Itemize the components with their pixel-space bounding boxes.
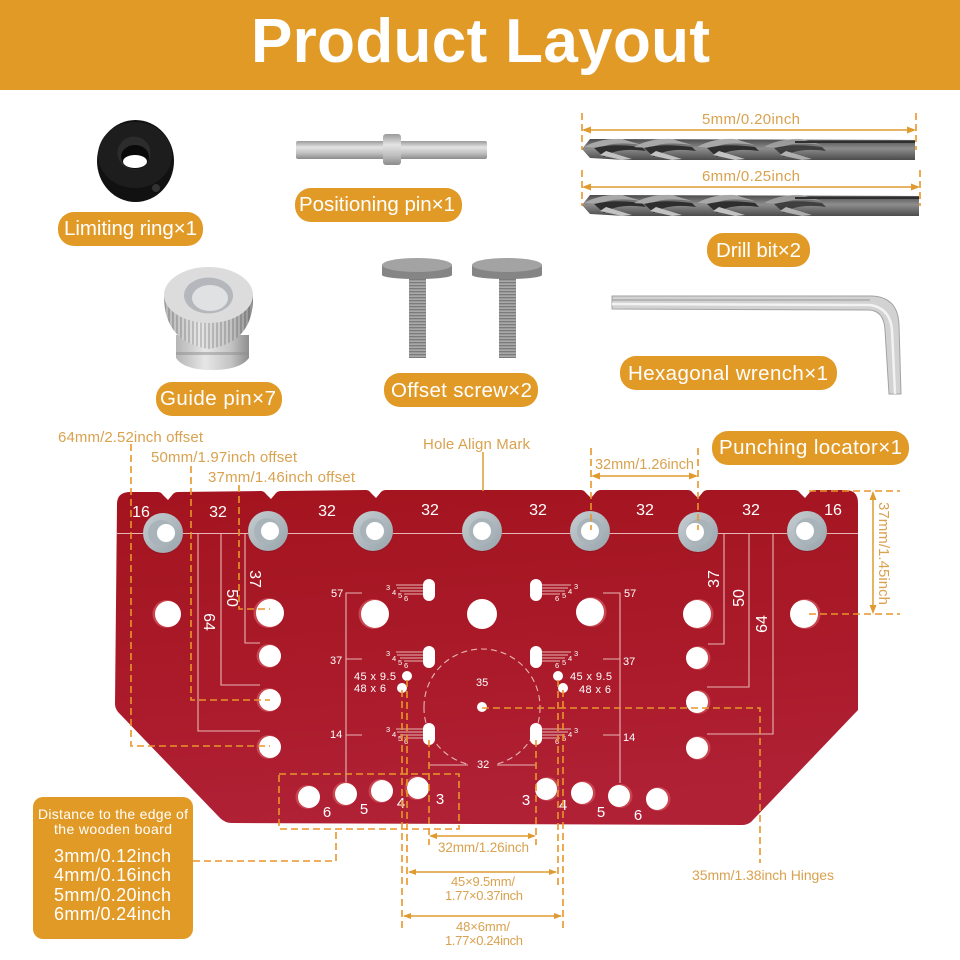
bottom edge distance numbers: 5 <box>360 801 368 818</box>
label: positioning pin: Positioning pin×1 <box>299 193 455 216</box>
drill bit 6mm <box>582 195 919 216</box>
dimension: 45x9.5mm: 45×9.5mm/ <box>451 874 515 889</box>
bottom edge distance numbers: 4 <box>397 795 405 812</box>
callout: distance to edge: 6mm/0.24inch <box>54 904 171 924</box>
callout: distance to edge: the wooden board <box>54 821 172 837</box>
header band <box>0 0 960 90</box>
small hole numbers: 48 x 6 <box>579 684 611 696</box>
small hole numbers: 48 x 6 <box>354 683 386 695</box>
label: drill bit <box>707 233 810 267</box>
offset labels <box>58 429 356 486</box>
rotated offset numbers: 64 <box>200 613 217 631</box>
spacing numbers: 32 <box>318 503 336 520</box>
limiting ring photo <box>97 120 174 202</box>
spacing numbers: 32 <box>529 502 547 519</box>
orange dashed measurement guides <box>131 444 900 930</box>
rotated offset numbers: 37 <box>246 570 263 588</box>
hole align mark pointer: Hole Align Mark <box>423 436 530 453</box>
dimension: 48x6mm <box>403 913 562 948</box>
small hole numbers: 37 <box>623 656 635 668</box>
hexagonal wrench <box>612 296 901 394</box>
small hole numbers <box>330 588 636 771</box>
dimension: 45x9.5mm <box>408 869 557 903</box>
offset screw 1 <box>382 258 452 358</box>
guide pin photo <box>164 267 253 370</box>
punching locator plate <box>115 490 858 825</box>
through hole rim highlights <box>152 597 820 811</box>
dimension: 6mm drill <box>582 168 920 206</box>
depth scale digits: 3 <box>386 583 390 592</box>
small hole numbers: 45 x 9.5 <box>354 671 396 683</box>
label: hexagonal wrench: Hexagonal wrench×1 <box>628 362 828 385</box>
label: limiting ring <box>58 212 203 246</box>
depth scale digits: 3 <box>574 649 578 658</box>
rotated offset numbers: 50 <box>731 589 748 607</box>
title: Product Layout <box>251 7 710 76</box>
depth scale digits: 4 <box>568 654 572 663</box>
depth scale digits: 3 <box>574 582 578 591</box>
rotated offset numbers: 64 <box>754 615 771 633</box>
small hole numbers: 14 <box>623 732 635 744</box>
depth scale digits: 6 <box>555 594 559 603</box>
spacing numbers: 16 <box>132 504 150 521</box>
offset labels: 37mm/1.46inch offset <box>208 469 356 486</box>
bottom edge distance numbers: 3 <box>436 791 444 808</box>
label: limiting ring: Limiting ring×1 <box>64 217 197 240</box>
callout: distance to edge: 5mm/0.20inch <box>54 885 171 905</box>
callout: distance to edge: 4mm/0.16inch <box>54 865 171 885</box>
depth scale digits: 5 <box>562 591 566 600</box>
callout: distance to edge: Distance to the edge of <box>38 806 188 822</box>
depth scale digits: 3 <box>386 725 390 734</box>
bottom edge distance numbers: 6 <box>323 804 331 821</box>
spacing numbers <box>132 502 842 521</box>
callout: distance to edge <box>33 797 193 939</box>
depth scale digits: 4 <box>392 588 396 597</box>
depth scale digits: 5 <box>398 734 402 743</box>
label: offset screw <box>384 373 538 407</box>
dimension: 32mm pitch: 32mm/1.26inch <box>595 457 694 473</box>
dimension: 5mm drill: 5mm/0.20inch <box>702 111 800 128</box>
depth scale digits: 4 <box>568 730 572 739</box>
dimension: 45x9.5mm: 1.77×0.37inch <box>445 888 523 903</box>
dimension: 32mm slots: 32mm/1.26inch <box>438 840 529 855</box>
depth scale digits: 4 <box>392 654 396 663</box>
spacing numbers: 32 <box>209 504 227 521</box>
label: offset screw: Offset screw×2 <box>391 379 532 402</box>
rotated offset numbers: 37 <box>706 570 723 588</box>
dimension: 48x6mm: 48×6mm/ <box>456 919 510 934</box>
label: positioning pin <box>295 188 462 222</box>
dimension: 37mm edge offset: 37mm/1.45inch <box>875 502 892 605</box>
dimension: 48x6mm: 1.77×0.24inch <box>445 933 523 948</box>
depth scale digits: 6 <box>404 737 408 746</box>
depth scale digits: 5 <box>562 658 566 667</box>
small hole numbers: 14 <box>330 729 342 741</box>
bottom edge distance numbers: 5 <box>597 804 605 821</box>
spacing numbers: 32 <box>742 502 760 519</box>
label: punching locator: Punching locator×1 <box>719 436 902 459</box>
depth scale digits: 3 <box>386 649 390 658</box>
rotated offset numbers: 50 <box>223 589 240 607</box>
dimension: 32mm slots <box>429 833 536 855</box>
depth scale digits: 6 <box>404 594 408 603</box>
offset screw 2 <box>472 258 542 358</box>
hole align mark pointer <box>423 436 530 491</box>
bottom edge distance numbers: 4 <box>559 797 567 814</box>
dimension: 32mm pitch <box>591 457 698 480</box>
small hole numbers: 32 <box>477 759 489 771</box>
dimension: 6mm drill: 6mm/0.25inch <box>702 168 800 185</box>
spacing numbers: 32 <box>636 502 654 519</box>
label: hexagonal wrench <box>620 356 837 390</box>
engraved lines <box>117 534 858 783</box>
small hole numbers: 57 <box>624 588 636 600</box>
label: guide pin: Guide pin×7 <box>160 387 276 410</box>
offset labels: 50mm/1.97inch offset <box>151 449 298 466</box>
small hole numbers: 45 x 9.5 <box>570 671 612 683</box>
depth scale digits: 6 <box>555 661 559 670</box>
depth scale digits: 4 <box>568 587 572 596</box>
positioning pin photo <box>296 134 487 165</box>
label: drill bit: Drill bit×2 <box>716 239 801 262</box>
depth scale digits: 3 <box>574 726 578 735</box>
callout: distance to edge: 3mm/0.12inch <box>54 846 171 866</box>
depth scale digits: 4 <box>392 730 396 739</box>
through holes <box>155 579 818 810</box>
bottom edge distance numbers <box>323 791 642 824</box>
depth scale digits: 5 <box>398 591 402 600</box>
depth scale digits: 6 <box>404 661 408 670</box>
drill bit 5mm <box>582 139 915 160</box>
depth scale digits: 5 <box>398 658 402 667</box>
bottom edge distance numbers: 3 <box>522 792 530 809</box>
spacing numbers: 16 <box>824 502 842 519</box>
label: guide pin <box>156 382 282 416</box>
small hole numbers: 57 <box>331 588 343 600</box>
depth scale digits <box>386 582 578 746</box>
small hole numbers: 35 <box>476 677 488 689</box>
dimension: 5mm drill <box>582 111 916 150</box>
depth scale digits: 5 <box>562 734 566 743</box>
guide pins on plate <box>143 511 827 554</box>
depth scale digits: 6 <box>555 737 559 746</box>
dimension: 37mm edge offset <box>870 491 892 614</box>
label: hinges dimension: 35mm/1.38inch Hinges <box>692 867 834 883</box>
rotated offset numbers <box>200 570 771 633</box>
bottom edge distance numbers: 6 <box>634 807 642 824</box>
small hole numbers: 37 <box>330 655 342 667</box>
offset labels: 64mm/2.52inch offset <box>58 429 204 446</box>
label: punching locator <box>712 431 909 465</box>
spacing numbers: 32 <box>421 502 439 519</box>
